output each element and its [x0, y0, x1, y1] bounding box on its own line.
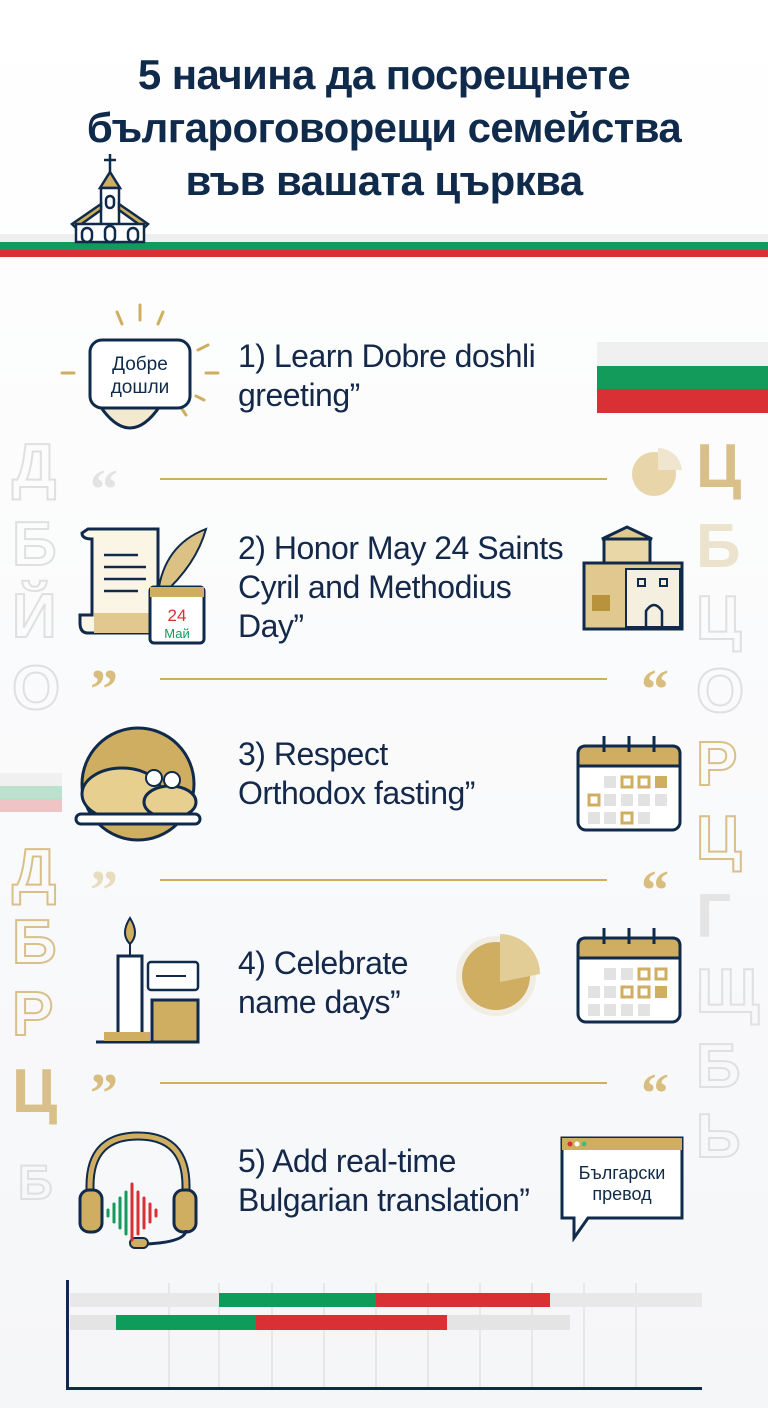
text: Cyril and Methodius — [238, 569, 511, 605]
text: name days” — [238, 984, 400, 1020]
icon: scroll with calendar: 24 — [168, 606, 186, 625]
side letters right — [696, 432, 760, 1158]
icon: pie chart — [456, 934, 540, 1016]
item 4 — [96, 916, 682, 1044]
side letters right: Б — [696, 512, 741, 581]
side letters left — [12, 443, 58, 1126]
icon: scroll with calendar — [78, 527, 208, 644]
text: ” — [90, 860, 118, 922]
icon: headset — [78, 1132, 198, 1249]
side letters right: Г — [696, 882, 731, 951]
icon: greeting bubble: дошли — [111, 377, 169, 398]
bar chart — [66, 1280, 702, 1390]
text: “ — [641, 659, 669, 721]
item 2 — [78, 525, 684, 644]
item 3 — [74, 726, 682, 842]
flag top right — [597, 342, 768, 413]
text: 5) Add real-time — [238, 1143, 456, 1179]
text: Day” — [238, 608, 304, 644]
text — [238, 1143, 529, 1218]
item 5 — [78, 1132, 684, 1249]
title — [87, 51, 682, 204]
flag stripe — [0, 234, 768, 257]
title: българоговорещи семейства — [87, 104, 681, 151]
text: ” — [90, 659, 118, 721]
title: във вашата църква — [185, 157, 582, 204]
icon: translation bubble: превод — [592, 1184, 652, 1204]
icon: translation bubble — [560, 1136, 684, 1242]
icon: calendar — [576, 928, 682, 1024]
text: 3) Respect — [238, 736, 388, 772]
icon: candle and gift — [96, 916, 200, 1044]
text: greeting” — [238, 377, 360, 413]
text — [238, 736, 475, 811]
text: Bulgarian translation” — [238, 1182, 529, 1218]
text: Orthodox fasting” — [238, 775, 475, 811]
text: ” — [90, 1063, 118, 1125]
text: 1) Learn Dobre doshli — [238, 338, 535, 374]
title: 5 начина да посрещнете — [138, 51, 630, 98]
icon: greeting bubble: Добре — [112, 354, 168, 375]
side letters right: Ц — [696, 432, 741, 501]
icon: translation bubble: Български — [579, 1163, 665, 1183]
icon: bread plate — [74, 726, 202, 842]
icon: monastery — [582, 525, 684, 630]
text: 2) Honor May 24 Saints — [238, 530, 563, 566]
dividers with quotes — [160, 478, 607, 480]
flag left faded — [0, 773, 62, 812]
icon: church — [70, 154, 150, 244]
text: “ — [641, 1063, 669, 1125]
icon: scroll with calendar: Май — [164, 626, 190, 641]
icon: greeting bubble — [60, 304, 220, 430]
side letters left: Ц — [12, 1057, 57, 1126]
item 1 — [60, 304, 535, 430]
text — [238, 530, 563, 644]
text — [238, 945, 408, 1020]
text: “ — [90, 459, 118, 521]
icon: calendar — [576, 736, 682, 832]
text: 4) Celebrate — [238, 945, 408, 981]
text: “ — [641, 860, 669, 922]
icon: pie faded — [632, 448, 682, 496]
text — [238, 338, 535, 413]
